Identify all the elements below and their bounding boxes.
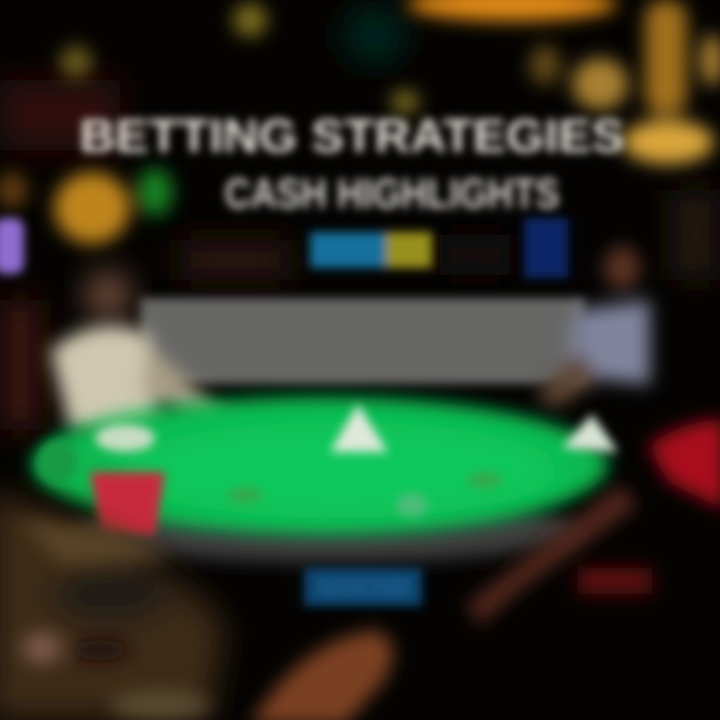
green felt highlight [120, 422, 560, 518]
button: blue call to action: SHOW [316, 572, 411, 602]
ceiling lights and gold decorations [0, 0, 720, 244]
icon: red cup [90, 472, 165, 535]
panel: grey back wall [140, 298, 585, 384]
button: blue call to action [304, 568, 422, 606]
foreground: brown arm at bottom [250, 630, 393, 720]
player: left torso [50, 325, 230, 440]
foreground: red jacket spectator [466, 420, 720, 625]
badge: blue and yellow logo [310, 232, 432, 268]
foreground: patterned spectator at left [0, 490, 225, 720]
title: BETTING STRATEGIES [80, 109, 624, 162]
banner: dark blue at right [524, 218, 568, 278]
player: left in white [86, 271, 130, 319]
multicolour light at left edge [0, 218, 24, 274]
background: dark casino room [0, 7, 720, 430]
subtitle: CASH HIGHLIGHTS [224, 170, 560, 218]
foreground: spectator highlights [20, 520, 210, 719]
table: white chips and cards [38, 404, 618, 517]
poker table: green felt [32, 397, 608, 562]
player: right in blue-grey [535, 246, 650, 408]
